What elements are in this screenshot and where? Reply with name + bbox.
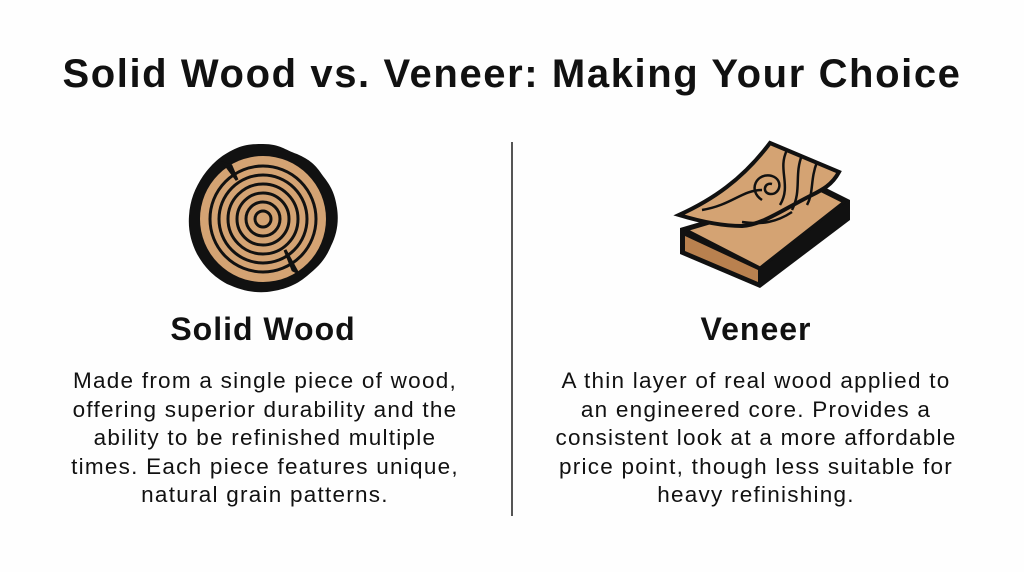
text: solid wood description: natural grain patterns. [141,482,389,507]
heading: solid wood: Solid Wood [170,311,356,347]
panel: veneer [555,140,957,507]
text: veneer description: consistent look at a more affordable [555,425,957,450]
text: solid wood description: offering superior durability and the [73,396,457,422]
panel: solid wood [71,144,459,507]
text: solid wood description: ability to be refinished multiple [94,425,436,450]
text: solid wood description: Made from a single piece of wood, [73,368,457,393]
heading: veneer: Veneer [701,311,811,347]
text: veneer description: an engineered core. Provides a [581,396,931,422]
text: veneer description: heavy refinishing. [657,482,855,507]
text: veneer description: A thin layer of real wood applied to [562,368,950,393]
text: veneer description [555,368,957,507]
text: solid wood description: times. Each piece features unique, [71,454,459,478]
text: veneer description: price point, though less suitable for [559,454,953,478]
icon: veneer sheet on board [674,140,850,288]
title: Solid Wood vs. Veneer: Making Your Choice [62,52,962,96]
text: solid wood description [71,368,459,507]
icon: log cross-section [188,144,338,292]
